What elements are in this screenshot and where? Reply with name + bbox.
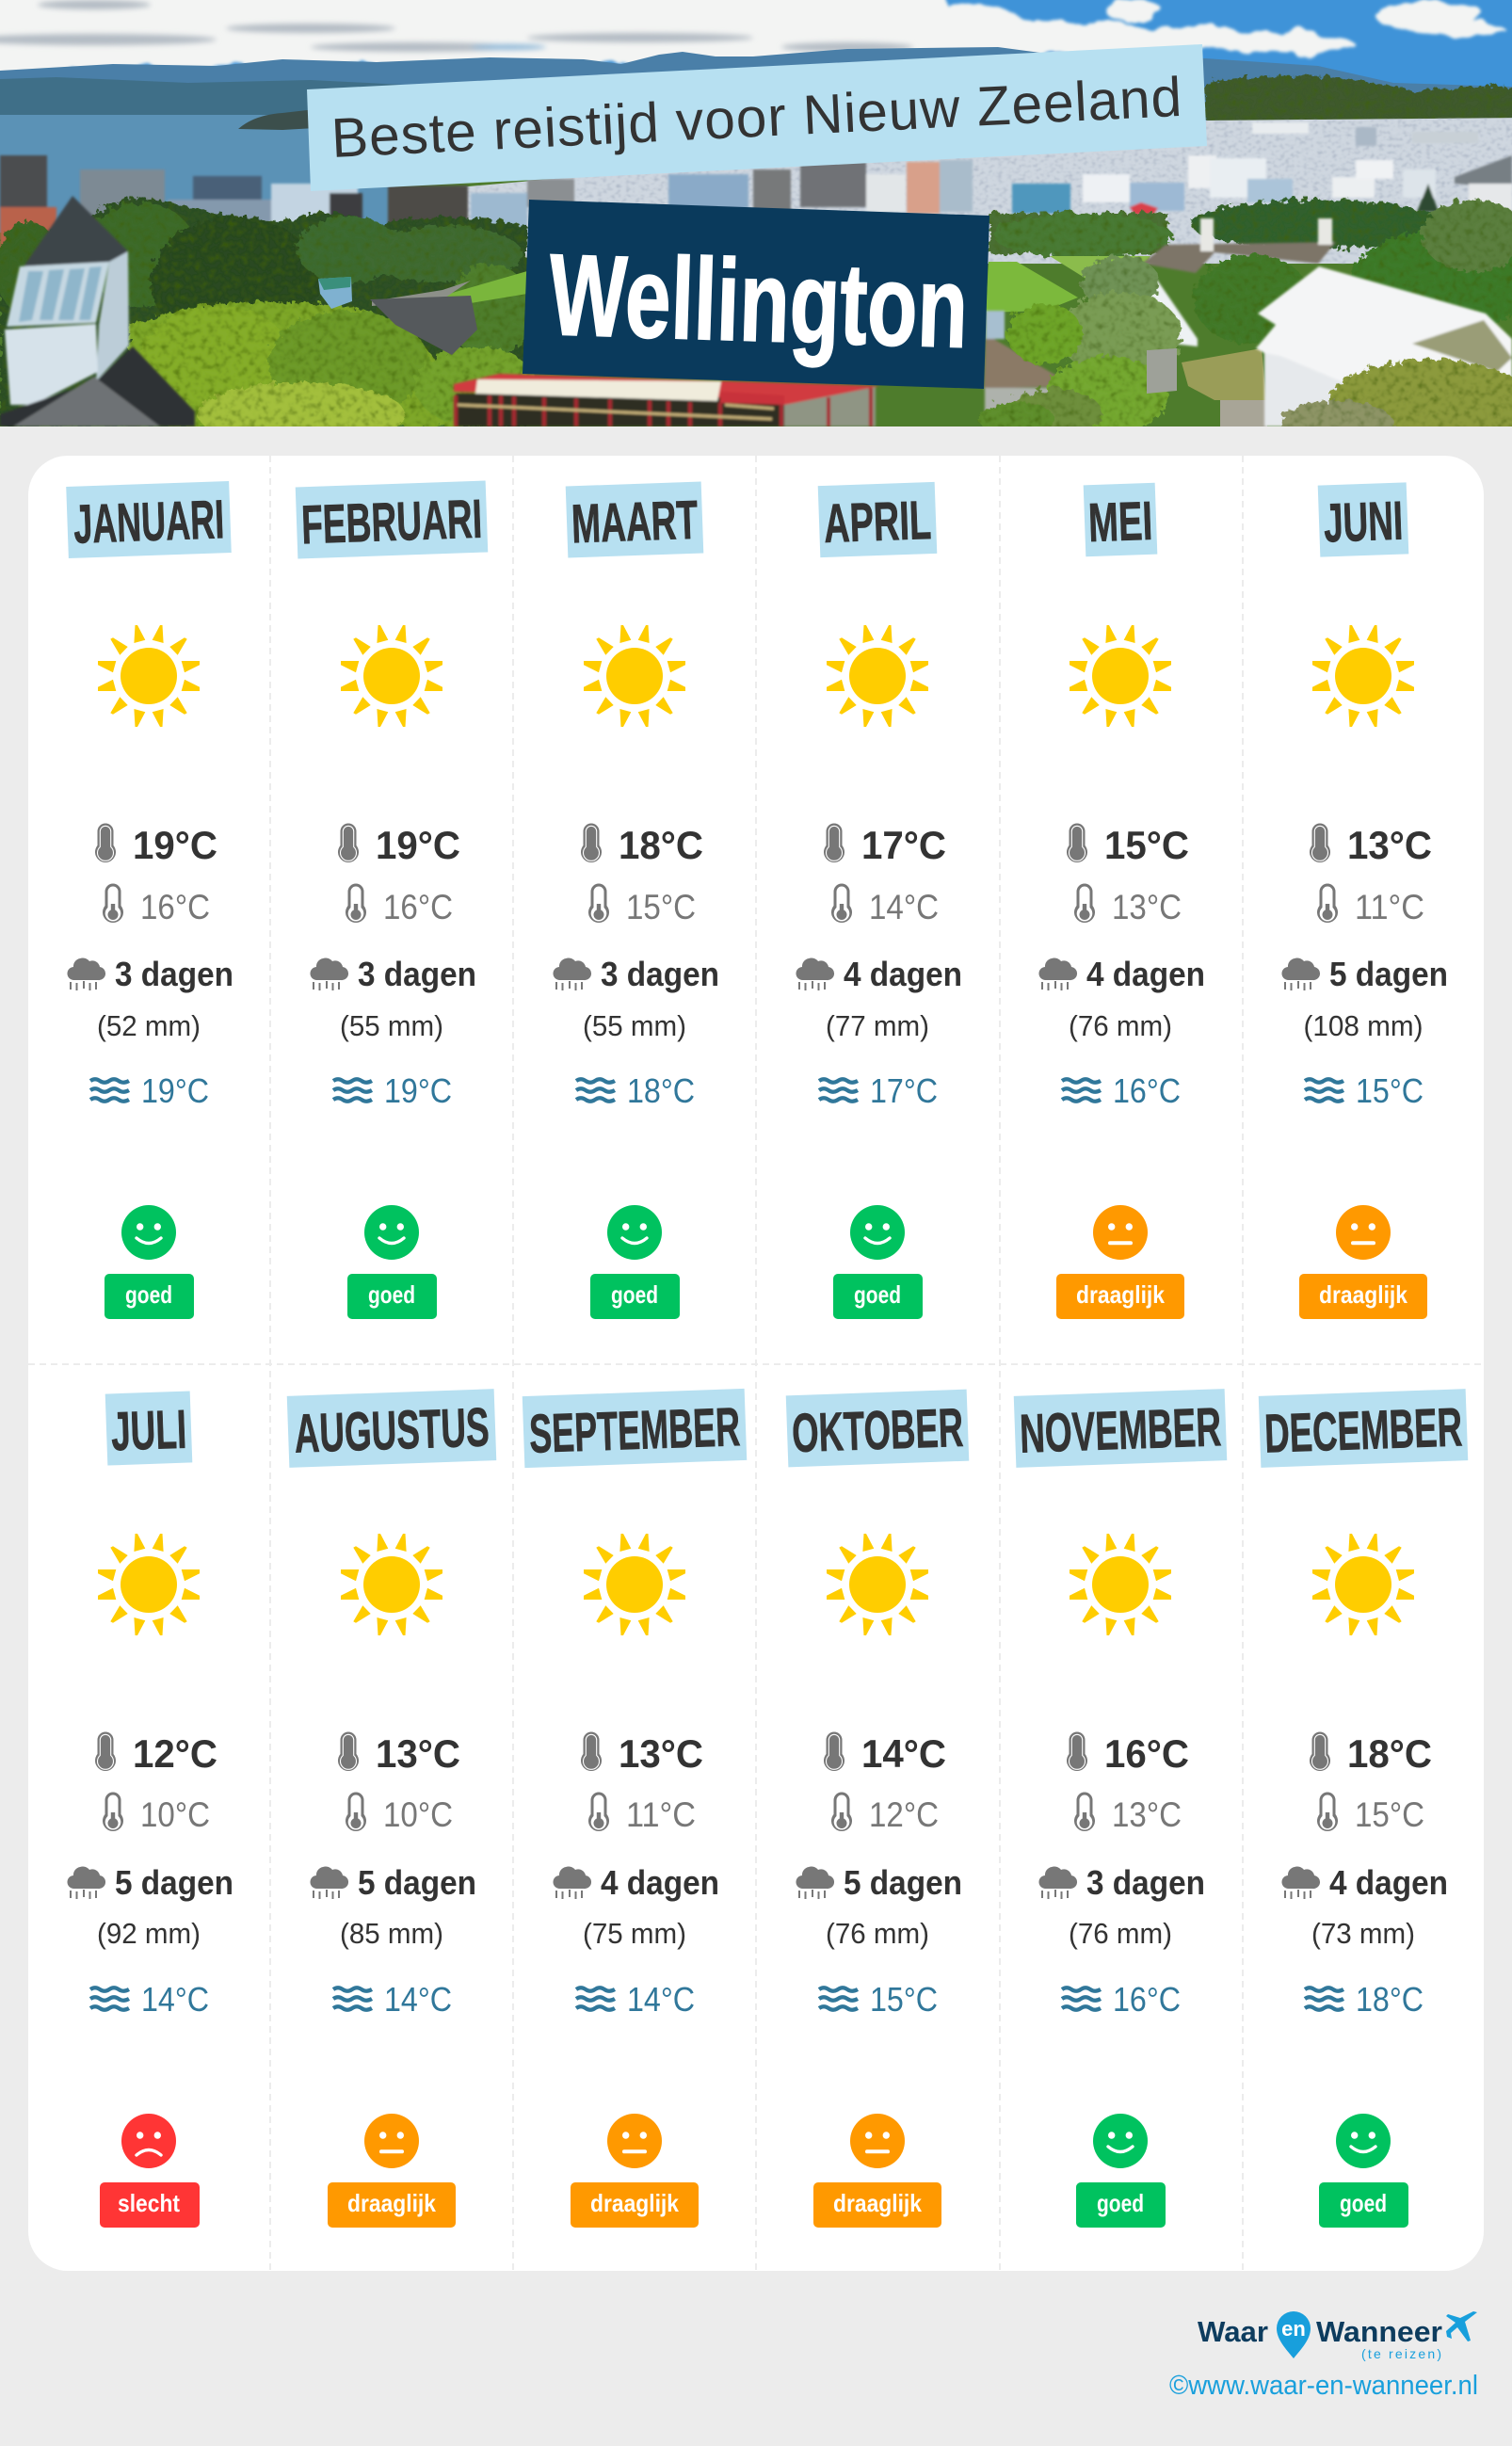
month heading: NOVEMBER <box>1019 1396 1222 1465</box>
rating: goed <box>590 1205 680 1319</box>
water temperature: 15°C <box>1356 1071 1424 1110</box>
rating: draaglijk <box>328 2114 456 2228</box>
title text: Beste reistijd voor Nieuw Zeeland <box>330 66 1184 169</box>
water temperature: 14°C <box>384 1980 452 2019</box>
panel: maart <box>553 482 719 1319</box>
rain days <box>796 955 962 993</box>
rating: goed <box>1319 2114 1408 2228</box>
low temperature <box>1317 883 1424 926</box>
month heading <box>786 1390 969 1467</box>
water temperature: 18°C <box>627 1071 695 1110</box>
icon: sun <box>827 625 928 727</box>
low temperature <box>1074 883 1182 926</box>
month heading <box>105 1391 192 1466</box>
water temperature <box>90 1980 209 2019</box>
water temperature <box>1062 1980 1181 2019</box>
icon: sun <box>1070 1534 1171 1635</box>
rain days <box>310 1863 476 1902</box>
low temperature <box>831 1793 939 1834</box>
rainfall: (55 mm) <box>340 1009 443 1042</box>
month heading <box>523 1389 747 1468</box>
website url: ©www.waar-en-wanneer.nl <box>1169 2371 1478 2401</box>
high temperature: 15°C <box>1104 823 1189 867</box>
rain days <box>1281 955 1448 993</box>
low temperature: 14°C <box>869 888 939 926</box>
water temperature: 19°C <box>141 1071 209 1110</box>
icon: sun <box>341 625 442 727</box>
low temperature: 12°C <box>869 1795 939 1834</box>
water temperature: 16°C <box>1113 1980 1181 2019</box>
logo: Waar en Wanneer: (te reizen) <box>1361 2346 1441 2361</box>
low temperature <box>1074 1793 1182 1834</box>
water temperature <box>576 1980 695 2019</box>
panel: juni <box>1281 482 1448 1319</box>
trees right <box>989 200 1512 334</box>
icon: sun <box>341 1534 442 1635</box>
rain days: 3 dagen <box>115 955 233 993</box>
icon: sun <box>1070 625 1171 727</box>
rainfall: (76 mm) <box>1069 1009 1172 1042</box>
rain days: 5 dagen <box>358 1863 476 1902</box>
rating: draaglijk: draaglijk <box>590 2189 679 2217</box>
high temperature: 17°C <box>861 823 946 867</box>
icon: location pin: en <box>1281 2317 1306 2341</box>
rating: goed: goed <box>854 1280 901 1309</box>
month heading <box>1318 482 1408 557</box>
high temperature <box>581 823 703 867</box>
rain days: 5 dagen <box>844 1863 962 1902</box>
rain days <box>1281 1863 1448 1902</box>
panel: februari <box>296 480 488 1319</box>
month heading: JULI <box>110 1399 187 1462</box>
high temperature <box>1067 823 1189 867</box>
high temperature: 18°C <box>619 823 703 867</box>
distant mountains <box>0 47 1512 121</box>
rating: goed: goed <box>1097 2189 1144 2217</box>
water temperature <box>1305 1071 1424 1110</box>
panel: september <box>523 1389 747 2228</box>
high temperature: 19°C <box>133 823 217 867</box>
high temperature <box>1067 1731 1189 1776</box>
rainfall: (85 mm) <box>340 1917 443 1950</box>
panel: november <box>1014 1389 1227 2228</box>
island <box>238 110 309 130</box>
high temperature: 18°C <box>1347 1731 1432 1776</box>
grey roof <box>370 296 477 355</box>
rainfall: (108 mm) <box>1303 1009 1424 1042</box>
panel: april <box>796 482 962 1319</box>
low temperature: 16°C <box>383 888 453 926</box>
rain days <box>1038 955 1205 993</box>
high temperature: 16°C <box>1104 1731 1189 1776</box>
rainfall: (73 mm) <box>1311 1917 1415 1950</box>
teal house <box>318 277 352 309</box>
logo: Waar en Wanneer <box>1198 2311 1477 2361</box>
month heading: OKTOBER <box>791 1397 964 1464</box>
low temperature: 11°C <box>1355 888 1424 926</box>
low temperature <box>588 1793 696 1834</box>
rain days <box>1038 1863 1205 1902</box>
icon: sun <box>98 1534 200 1635</box>
rating: draaglijk: draaglijk <box>1076 1280 1165 1309</box>
icon: sun <box>1312 1534 1414 1635</box>
high temperature: 13°C <box>376 1731 460 1776</box>
high temperature: 13°C <box>619 1731 703 1776</box>
rain days <box>67 955 233 993</box>
water temperature <box>1062 1071 1181 1110</box>
high temperature: 14°C <box>861 1731 946 1776</box>
water temperature: 18°C <box>1356 1980 1424 2019</box>
rating: goed: goed <box>1340 2189 1387 2217</box>
sea <box>0 115 395 233</box>
rating: goed: goed <box>125 1280 172 1309</box>
rating: draaglijk <box>813 2114 941 2228</box>
high temperature: 19°C <box>376 823 460 867</box>
white house <box>1256 266 1512 426</box>
icon: sun <box>584 625 685 727</box>
low temperature <box>588 883 696 926</box>
month heading <box>1014 1389 1227 1468</box>
low temperature <box>346 1793 453 1834</box>
rainfall: (76 mm) <box>1069 1917 1172 1950</box>
rating: goed: goed <box>368 1280 415 1309</box>
high temperature <box>1310 1731 1432 1776</box>
water temperature <box>333 1071 452 1110</box>
rain days <box>67 1863 233 1902</box>
city <box>395 118 1512 264</box>
rating: draaglijk: draaglijk <box>347 2189 436 2217</box>
high temperature <box>824 1731 946 1776</box>
low temperature: 13°C <box>1112 888 1182 926</box>
header photo: Wellington skyline <box>0 0 1512 450</box>
month heading <box>66 481 232 558</box>
month heading <box>1084 483 1157 556</box>
tower <box>0 196 195 426</box>
icon: sun <box>584 1534 685 1635</box>
icon: sun <box>98 625 200 727</box>
rating: slecht <box>100 2114 200 2228</box>
rain days <box>796 1863 962 1902</box>
month heading <box>296 480 488 559</box>
city banner: Wellington <box>523 200 989 389</box>
rating: draaglijk <box>1299 1205 1427 1319</box>
month heading: JANUARI <box>72 489 225 555</box>
low temperature: 11°C <box>626 1795 696 1834</box>
month heading: JUNI <box>1323 491 1404 554</box>
panel: augustus <box>287 1389 496 2228</box>
rainfall: (76 mm) <box>826 1917 929 1950</box>
white card <box>28 456 1484 2271</box>
rating: goed <box>105 1205 194 1319</box>
left house <box>984 218 1336 426</box>
month heading <box>566 482 703 557</box>
trees left <box>0 198 537 446</box>
icon: airplane <box>1446 2311 1477 2341</box>
month heading: AUGUSTUS <box>294 1396 491 1465</box>
clouds <box>0 0 1506 73</box>
high temperature <box>338 823 460 867</box>
low temperature: 15°C <box>626 888 696 926</box>
rain days: 5 dagen <box>115 1863 233 1902</box>
rating: draaglijk: draaglijk <box>833 2189 922 2217</box>
logo: Waar en Wanneer: Waar <box>1198 2315 1268 2348</box>
month heading: MAART <box>571 490 699 555</box>
fence and shed <box>1147 348 1177 394</box>
water temperature <box>819 1980 938 2019</box>
rain days: 3 dagen <box>601 955 719 993</box>
water temperature <box>576 1071 695 1110</box>
panel: januari <box>66 481 233 1319</box>
low temperature <box>346 883 453 926</box>
panel: oktober <box>786 1390 969 2228</box>
rain days: 3 dagen <box>358 955 476 993</box>
water temperature: 14°C <box>627 1980 695 2019</box>
icon: sun <box>1312 625 1414 727</box>
rain days <box>310 955 476 993</box>
low temperature: 10°C <box>140 1795 210 1834</box>
high temperature <box>338 1731 460 1776</box>
rainfall: (75 mm) <box>583 1917 686 1950</box>
rain days: 4 dagen <box>1086 955 1205 993</box>
high temperature <box>1310 823 1432 867</box>
low temperature <box>103 1793 210 1834</box>
high temperature: 13°C <box>1347 823 1432 867</box>
rating: draaglijk: draaglijk <box>1319 1280 1407 1309</box>
low temperature <box>103 883 210 926</box>
lawn right <box>986 262 1078 313</box>
rainfall: (92 mm) <box>97 1917 201 1950</box>
rainfall: (77 mm) <box>826 1009 929 1042</box>
high temperature: 12°C <box>133 1731 217 1776</box>
panel: mei <box>1038 483 1205 1319</box>
logo: Waar en Wanneer: Wanneer <box>1316 2315 1442 2348</box>
water temperature <box>90 1071 209 1110</box>
title banner <box>307 44 1207 191</box>
rain days <box>553 1863 719 1902</box>
rating: draaglijk <box>571 2114 699 2228</box>
high temperature <box>581 1731 703 1776</box>
city name: Wellington <box>547 231 970 373</box>
water temperature: 19°C <box>384 1071 452 1110</box>
green hills <box>1204 73 1512 121</box>
water temperature: 16°C <box>1113 1071 1181 1110</box>
month heading <box>287 1389 496 1468</box>
low temperature <box>1317 1793 1424 1834</box>
month heading: APRIL <box>823 490 932 555</box>
rating: goed <box>1076 2114 1166 2228</box>
rain days: 4 dagen <box>1329 1863 1448 1902</box>
icon: sun <box>827 1534 928 1635</box>
month heading: SEPTEMBER <box>528 1396 741 1465</box>
low temperature: 13°C <box>1112 1795 1182 1834</box>
rating: goed <box>347 1205 437 1319</box>
rating: goed: goed <box>611 1280 658 1309</box>
low temperature: 16°C <box>140 888 210 926</box>
water temperature: 14°C <box>141 1980 209 2019</box>
rain days: 5 dagen <box>1329 955 1448 993</box>
water temperature <box>333 1980 452 2019</box>
rainfall: (52 mm) <box>97 1009 201 1042</box>
rain days: 4 dagen <box>601 1863 719 1902</box>
icon: location pin <box>1277 2311 1311 2358</box>
cable car <box>454 374 880 426</box>
water temperature: 15°C <box>870 1980 938 2019</box>
month heading: MEI <box>1087 491 1153 554</box>
panel: juli <box>67 1391 233 2228</box>
high temperature <box>95 823 217 867</box>
lawn left <box>442 271 527 303</box>
low temperature: 10°C <box>383 1795 453 1834</box>
rain days: 3 dagen <box>1086 1863 1205 1902</box>
low temperature <box>831 883 939 926</box>
rating: slecht: slecht <box>118 2189 180 2217</box>
month heading <box>818 482 937 557</box>
rating: goed <box>833 1205 923 1319</box>
high temperature <box>824 823 946 867</box>
low temperature: 15°C <box>1355 1795 1424 1834</box>
rain days <box>553 955 719 993</box>
rain days: 4 dagen <box>844 955 962 993</box>
water temperature <box>819 1071 938 1110</box>
rainfall: (55 mm) <box>583 1009 686 1042</box>
high temperature <box>95 1731 217 1776</box>
rating: draaglijk <box>1056 1205 1184 1319</box>
water temperature: 17°C <box>870 1071 938 1110</box>
month heading: FEBRUARI <box>300 489 483 555</box>
water temperature <box>1305 1980 1424 2019</box>
panel: december <box>1259 1389 1468 2228</box>
